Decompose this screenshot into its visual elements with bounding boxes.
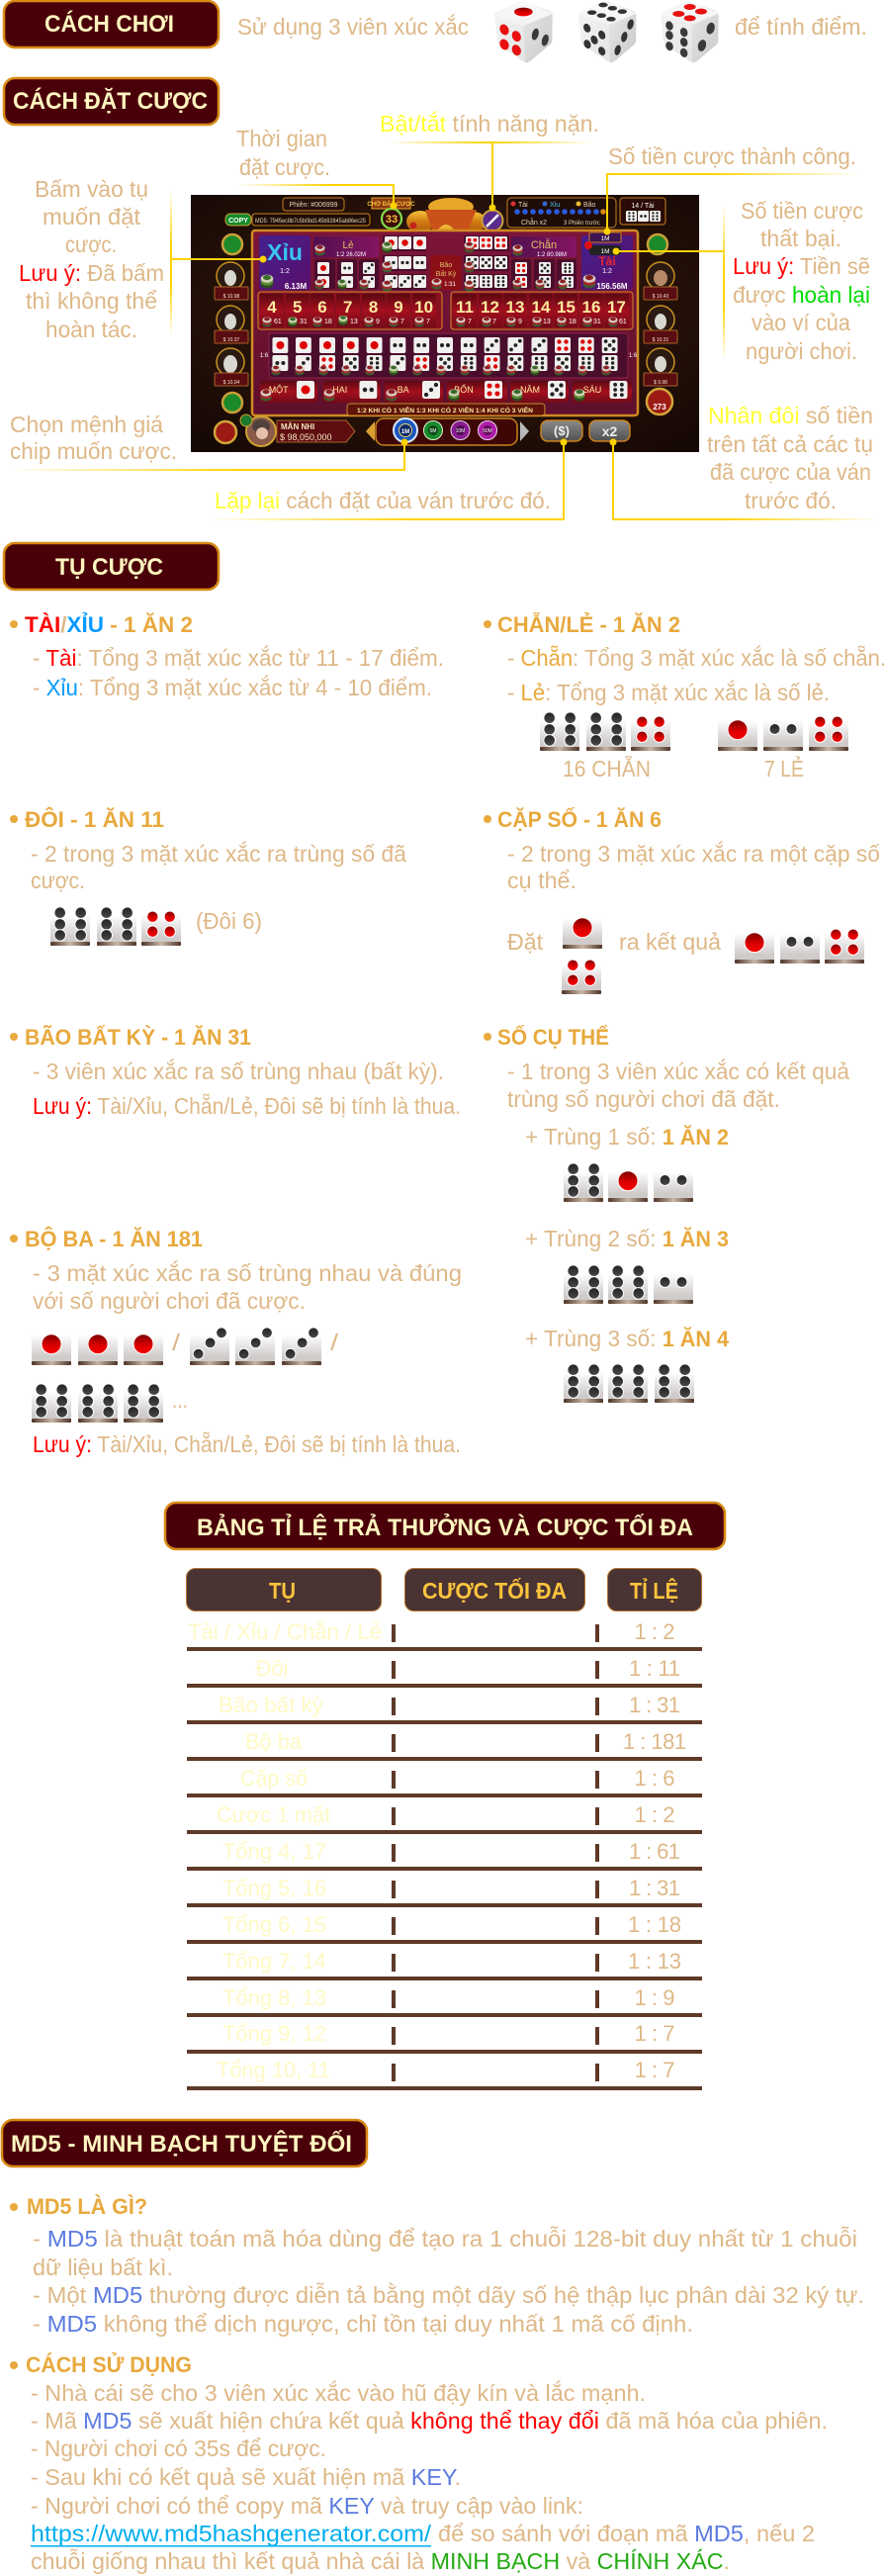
panel: tài xỉu: TÀI/XỈU - 1 ĂN 2 xyxy=(25,612,193,637)
bet: Xỉu xyxy=(259,235,310,291)
row: cặp số: 1 : 6 xyxy=(635,1766,674,1791)
number bets 11 to 17: 7 xyxy=(468,319,472,325)
callout: chọn mệnh giá: chip muốn cược. xyxy=(10,438,177,464)
number bets 4 to 10: 61 xyxy=(274,319,282,325)
callout: nhân đôi: trước đó. xyxy=(745,488,837,513)
panel: chẵn lẻ: 16 CHẴN xyxy=(563,755,651,782)
pair bets: 1:6 xyxy=(260,353,269,359)
number bets 4 to 10: 13 xyxy=(350,319,358,325)
callout: thời gian đặt cược: Thời gian xyxy=(236,126,327,151)
side round buttons: 273 xyxy=(653,403,666,412)
pair bets: 1:6 xyxy=(629,353,638,359)
number bets 11 to 17: 14 xyxy=(532,298,551,317)
number bets 11 to 17: 61 xyxy=(619,319,627,325)
heading button: cách đặt cược: CÁCH ĐẶT CƯỢC xyxy=(13,87,208,115)
panel: bộ ba: Lưu ý: Tài/Xỉu, Chẵn/Lẻ, Đôi sẽ bị tính là thua. xyxy=(33,1430,461,1457)
side player avatars xyxy=(215,262,677,386)
number bets 4 to 10 xyxy=(258,292,442,329)
panel: cách chơi xyxy=(4,1,867,62)
single number bets xyxy=(260,381,632,403)
bet: Bão bất kỳ: 1:31 xyxy=(444,282,456,288)
callout: lặp lại: Lặp lại cách đặt của ván trước đó. xyxy=(215,488,551,513)
panel: số cụ thể: + Trùng 1 số: 1 ĂN 2 xyxy=(525,1124,729,1150)
panel: bộ ba: với số người chơi đã cược. xyxy=(33,1288,306,1314)
number bets 11 to 17: 15 xyxy=(557,298,576,317)
side player avatars: $ 10.37 xyxy=(223,337,240,343)
bet: Tài: 156.56M xyxy=(596,282,628,291)
callout: nhân đôi: đã cược của ván xyxy=(710,459,871,485)
single number bets: SÁU xyxy=(583,385,601,395)
row: tổng 9, 12: 1 : 7 xyxy=(635,2021,674,2046)
table header: tụ xyxy=(186,1569,382,1610)
row: bão bất kỳ: Bão bất kỳ xyxy=(219,1693,323,1717)
game background xyxy=(191,195,699,452)
callout: bật tắt tính năng nặn: Bật/tắt tính năng nặn. xyxy=(380,111,599,137)
gold frog ornament xyxy=(406,198,487,250)
panel: cách sử dụng: - Người chơi có 35s để cược. xyxy=(31,2436,326,2461)
callout: số tiền cược thất bại: thất bại. xyxy=(760,226,842,251)
row: đôi: 1 : 11 xyxy=(629,1656,680,1681)
row: bộ ba xyxy=(187,1729,702,1761)
panel: cách sử dụng: https://www.md5hashgenerator.com/ xyxy=(31,2521,432,2546)
panel: số cụ thể: + Trùng 3 số: 1 ĂN 4 xyxy=(525,1326,730,1351)
bet: Chẵn: 1:2 80.98M xyxy=(537,252,567,258)
row: tổng 4, 17 xyxy=(187,1839,702,1871)
bet: Xỉu: 6.13M xyxy=(285,282,307,291)
game top bar: Phiên: #006999 xyxy=(289,202,338,209)
panel: md5 là gì: dữ liệu bất kì. xyxy=(33,2254,173,2280)
bet: Bão bất kỳ: Bão xyxy=(440,262,452,269)
bet: Xỉu: Xỉu xyxy=(267,239,303,265)
history panel: Xỉu xyxy=(550,201,560,209)
game top bar: 33 xyxy=(386,214,398,226)
payout band xyxy=(347,404,545,415)
heading button: md5 xyxy=(2,2120,367,2166)
panel: bộ ba: BỘ BA - 1 ĂN 181 xyxy=(25,1227,203,1251)
heading button: cách đặt cược xyxy=(4,78,219,125)
repeat button: ($) xyxy=(554,423,570,438)
bet tags 1M: 1M xyxy=(600,248,610,255)
panel: bộ ba: / xyxy=(172,1330,181,1355)
panel: bão bất kỳ: - 3 viên xúc xắc ra số trùng nhau (bất kỳ). xyxy=(33,1058,444,1084)
number bets 4 to 10: 31 xyxy=(300,319,308,325)
callout: số tiền cược thất bại: vào ví của xyxy=(752,310,850,335)
single number bets: BA xyxy=(398,385,409,395)
number bets 11 to 17: 13 xyxy=(506,298,524,317)
row: tổng 9, 12 xyxy=(187,2021,702,2054)
callout: bấm vào tụ: thì không thể xyxy=(26,288,157,314)
row: cược 1 mặt xyxy=(187,1802,702,1834)
chip selector: 10M xyxy=(456,428,465,434)
history panel: Chẵn x2 xyxy=(521,218,547,227)
side player avatars: $ 10.31 xyxy=(653,337,669,343)
panel: cách sử dụng: - Sau khi có kết quả sẽ xuất hiện mã KEY. xyxy=(31,2464,461,2490)
row: tổng 5, 16: 1 : 31 xyxy=(629,1876,680,1900)
panel: đôi: - 2 trong 3 mặt xúc xắc ra trùng số đã xyxy=(31,841,406,867)
bet: Lẻ: 1:2 26.02M xyxy=(336,252,366,258)
row: cặp số xyxy=(187,1766,702,1797)
table header: tỉ lệ: TỈ LỆ xyxy=(630,1576,678,1604)
panel: chẵn lẻ: - Lẻ: Tổng 3 mặt xúc xắc là số lẻ. xyxy=(507,680,830,705)
player plate: $ 98,050,000 xyxy=(280,432,332,442)
callout: lặp lại xyxy=(207,439,568,520)
number bets 11 to 17: 9 xyxy=(518,319,522,325)
row: cược 1 mặt: Cược 1 mặt xyxy=(217,1802,330,1827)
heading button: bảng tỉ lệ xyxy=(165,1503,725,1549)
callout: thời gian đặt cược: đặt cược. xyxy=(239,154,330,180)
number bets 4 to 10: 5 xyxy=(293,298,302,317)
panel: tài xỉu: - Tài: Tổng 3 mặt xúc xắc từ 11 - 17 điểm. xyxy=(33,645,444,671)
panel: chẵn lẻ: CHẴN/LẺ - 1 ĂN 2 xyxy=(497,612,680,637)
row: tổng 10, 11: Tổng 10, 11 xyxy=(217,2058,330,2082)
panel: tài xỉu xyxy=(10,612,444,700)
number bets 11 to 17: 12 xyxy=(481,298,499,317)
row: tổng 5, 16 xyxy=(187,1876,702,1907)
panel: md5 là gì: - MD5 là thuật toán mã hóa dùng để tạo ra 1 chuỗi 128-bit duy nhất từ 1 chuỗi xyxy=(33,2226,857,2252)
number bets 11 to 17: 11 xyxy=(456,298,474,317)
row: tổng 4, 17: Tổng 4, 17 xyxy=(222,1839,326,1864)
panel: cặp số: - 2 trong 3 mặt xúc xắc ra một cặp số xyxy=(507,841,880,867)
bet: Tài xyxy=(581,235,633,291)
panel: chẵn lẻ: 7 LẺ xyxy=(764,754,804,782)
heading button: cách chơi xyxy=(4,1,219,47)
panel: đôi: cược. xyxy=(31,868,85,893)
bet: Lẻ xyxy=(313,236,379,258)
history panel: Bão xyxy=(583,202,596,209)
player plate: MẪN NHI xyxy=(281,422,314,431)
table header: cược tối đa xyxy=(405,1569,585,1610)
row: đôi: Đôi xyxy=(255,1656,289,1681)
heading button: bảng tỉ lệ: BẢNG TỈ LỆ TRẢ THƯỞNG VÀ CƯỢC TỐI ĐA xyxy=(197,1513,693,1541)
panel: bão bất kỳ: Lưu ý: Tài/Xỉu, Chẵn/Lẻ, Đôi sẽ bị tính là thua. xyxy=(33,1092,461,1119)
row: tổng 8, 13 xyxy=(187,1985,702,2017)
history panel xyxy=(507,198,665,228)
callout: nhân đôi: Nhân đôi số tiền xyxy=(708,403,873,428)
number bets 11 to 17: 31 xyxy=(593,319,601,325)
panel: cách sử dụng: CÁCH SỬ DỤNG xyxy=(26,2352,192,2377)
callout: nhân đôi: trên tất cả các tụ xyxy=(707,431,873,457)
panel: đôi xyxy=(10,807,406,946)
heading button: md5: MD5 - MINH BẠCH TUYỆT ĐỐI xyxy=(11,2130,352,2158)
repeat button xyxy=(541,420,582,441)
row: bộ ba: 1 : 181 xyxy=(623,1729,686,1754)
game top bar: CHỜ ĐẶT CƯỢC xyxy=(367,200,415,208)
bet tags 1M: 1M xyxy=(600,235,610,242)
callout: bật tắt tính năng nặn xyxy=(380,111,599,212)
row: bão bất kỳ xyxy=(187,1693,702,1724)
panel: số cụ thể: - 1 trong 3 viên xúc xắc có kết quả xyxy=(507,1058,849,1084)
game top bar: COPY xyxy=(228,218,248,225)
callout: số tiền cược thất bại: Lưu ý: Tiền sẽ xyxy=(733,253,870,279)
row: bộ ba: Bộ ba xyxy=(245,1729,303,1754)
callout: bấm vào tụ xyxy=(19,176,267,342)
row: tổng 4, 17: 1 : 61 xyxy=(629,1839,680,1864)
callout: số tiền cược thành công: Số tiền cược thành công. xyxy=(608,143,856,169)
number bets 4 to 10: 10 xyxy=(414,298,433,317)
panel: cặp số xyxy=(484,806,880,994)
row: tổng 7, 14: 1 : 13 xyxy=(628,1949,681,1974)
number bets 11 to 17: 16 xyxy=(582,298,600,317)
callout: bấm vào tụ: Bấm vào tụ xyxy=(35,176,148,202)
bet tags 1M xyxy=(584,232,621,255)
callout: số tiền cược thất bại xyxy=(613,198,870,364)
game top bar: MD5: 7945ec8b7c5b0bd145b92845ab86ec25 xyxy=(255,219,367,225)
icon: three dice xyxy=(494,1,719,62)
row: tổng 9, 12: Tổng 9, 12 xyxy=(222,2021,326,2046)
text: để tính điểm: để tính điểm. xyxy=(735,14,867,40)
payout band: 1:2 KHI CÓ 1 VIÊN 1:3 KHI CÓ 2 VIÊN 1:4 KHI CÓ 3 VIÊN xyxy=(357,407,533,414)
single number bets: BỐN xyxy=(454,384,474,395)
bet: single dice pairs right xyxy=(511,259,576,289)
panel: md5 là gì: - Một MD5 thường được diễn tả bằng một dãy số hệ thập lục phân dài 32 ký tự. xyxy=(33,2282,864,2308)
number bets 11 to 17: 18 xyxy=(569,319,576,325)
row: tổng 10, 11 xyxy=(187,2058,702,2090)
panel: tài xỉu: - Xỉu: Tổng 3 mặt xúc xắc từ 4 - 10 điểm. xyxy=(33,675,432,700)
bet: Tài: Tài xyxy=(598,254,616,268)
toggle squeeze button xyxy=(483,210,502,231)
panel: cặp số: CẶP SỐ - 1 ĂN 6 xyxy=(497,806,662,832)
callout: bấm vào tụ: Lưu ý: Đã bấm xyxy=(19,260,164,286)
chip selector xyxy=(366,418,529,445)
side player avatars: $ 10.98 xyxy=(223,294,240,300)
number bets 4 to 10: 9 xyxy=(394,298,403,317)
row: tài xỉu chẵn lẻ xyxy=(187,1619,702,1651)
callout: bấm vào tụ: hoàn tác. xyxy=(45,317,137,342)
number bets 4 to 10: 7 xyxy=(343,298,352,317)
side player avatars: $ 10.43 xyxy=(653,294,669,300)
callout: nhân đôi xyxy=(609,403,880,520)
bet: Tài: 1:2 xyxy=(602,268,612,275)
row: đôi xyxy=(187,1656,702,1688)
heading button: tụ cược: TỤ CƯỢC xyxy=(55,554,163,581)
panel: md5 là gì: MD5 LÀ GÌ? xyxy=(27,2194,147,2219)
row: tổng 6, 15 xyxy=(187,1912,702,1944)
panel: số cụ thể: + Trùng 2 số: 1 ĂN 3 xyxy=(525,1226,729,1251)
chip selector: 1M xyxy=(401,429,409,435)
heading button: tụ cược xyxy=(4,543,219,590)
callout: số tiền cược thất bại: Số tiền cược xyxy=(741,198,863,224)
bet: triples right xyxy=(464,235,509,292)
panel: cách sử dụng: chuỗi giống nhau thì kết quả nhà cái là MINH BẠCH và CHÍNH XÁC. xyxy=(31,2548,730,2574)
number bets 4 to 10: 6 xyxy=(317,298,327,317)
number bets 4 to 10: 8 xyxy=(369,298,378,317)
number bets 4 to 10: 7 xyxy=(426,319,430,325)
bet: Bão bất kỳ xyxy=(430,255,461,290)
panel: cách sử dụng: - Nhà cái sẽ cho 3 viên xúc xắc vào hũ đậy kín và lắc mạnh. xyxy=(31,2380,646,2406)
panel: bộ ba: ... xyxy=(172,1387,188,1413)
heading button: cách chơi: CÁCH CHƠI xyxy=(44,10,174,38)
number bets 11 to 17: 13 xyxy=(543,319,551,325)
table header: cược tối đa: CƯỢC TỐI ĐA xyxy=(422,1577,567,1604)
number bets 4 to 10: 7 xyxy=(400,319,404,325)
callout: chọn mệnh giá: Chọn mệnh giá xyxy=(10,412,163,437)
row: tổng 6, 15: Tổng 6, 15 xyxy=(222,1912,326,1937)
history panel: Tài xyxy=(518,202,528,209)
panel: bộ ba xyxy=(10,1227,462,1457)
row: cược 1 mặt: 1 : 2 xyxy=(635,1802,674,1827)
number bets 4 to 10: 9 xyxy=(376,319,380,325)
panel: md5 là gì: - MD5 không thể dịch ngược, chỉ tồn tại duy nhất 1 mã cố định. xyxy=(33,2311,693,2337)
panel: số cụ thể: trùng số người chơi đã đặt. xyxy=(507,1086,780,1112)
row: tổng 6, 15: 1 : 18 xyxy=(628,1912,681,1937)
history panel: 14 / Tài xyxy=(631,203,655,210)
row: tổng 8, 13: 1 : 9 xyxy=(635,1985,674,2010)
number bets 11 to 17 xyxy=(451,292,633,329)
panel: cặp số: cụ thể. xyxy=(507,868,576,893)
bet: Bão bất kỳ: Bất Kỳ xyxy=(436,269,457,278)
number bets 4 to 10: 18 xyxy=(324,319,332,325)
panel: đôi: (Đôi 6) xyxy=(196,908,262,934)
callout: bấm vào tụ: cược. xyxy=(65,231,117,257)
side round buttons xyxy=(215,234,672,443)
text: sử dụng: Sử dụng 3 viên xúc xắc xyxy=(237,14,469,40)
row: tổng 5, 16: Tổng 5, 16 xyxy=(222,1876,326,1900)
panel: bão bất kỳ: BÃO BẤT KỲ - 1 ĂN 31 xyxy=(25,1025,251,1050)
callout: số tiền cược thất bại: người chơi. xyxy=(746,338,857,364)
panel: bão bất kỳ xyxy=(10,1025,461,1119)
panel: cặp số: Đặt xyxy=(507,929,544,955)
chip selector: 50M xyxy=(483,428,492,434)
bet: Chẵn: Chẵn xyxy=(531,238,557,251)
row: tổng 10, 11: 1 : 7 xyxy=(635,2058,674,2082)
row: tổng 8, 13: Tổng 8, 13 xyxy=(222,1985,326,2010)
row: tổng 7, 14 xyxy=(187,1949,702,1980)
bet: triples left xyxy=(382,235,426,292)
bet: single dice pairs left xyxy=(314,259,379,289)
row: tổng 7, 14: Tổng 7, 14 xyxy=(222,1949,326,1974)
callout: số tiền cược thành công xyxy=(603,143,859,235)
table header: tỉ lệ xyxy=(607,1569,702,1610)
double button xyxy=(589,420,630,441)
panel: cách sử dụng xyxy=(10,2352,828,2574)
number bets 11 to 17: 17 xyxy=(607,298,626,317)
panel: bộ ba: - 3 mặt xúc xắc ra số trùng nhau và đúng xyxy=(33,1260,462,1286)
game top bar xyxy=(225,198,415,229)
panel: cách sử dụng: - Mã MD5 sẽ xuất hiện chứa kết quả không thể thay đổi đã mã hóa của phiên. xyxy=(31,2408,828,2434)
bet: Xỉu: 1:2 xyxy=(280,268,290,275)
panel: cách sử dụng: - Người chơi có thể copy mã KEY và truy cập vào link: xyxy=(31,2493,583,2519)
panel: đôi: ĐÔI - 1 ĂN 11 xyxy=(25,807,164,832)
row: tài xỉu chẵn lẻ: 1 : 2 xyxy=(635,1619,674,1644)
callout: thời gian đặt cược xyxy=(236,126,398,210)
panel: game screenshot xyxy=(191,195,699,452)
bet: Chẵn xyxy=(511,236,576,258)
panel: md5 là gì xyxy=(10,2194,864,2337)
panel: cặp số: ra kết quả xyxy=(619,929,721,955)
panel: bộ ba: / xyxy=(330,1330,339,1355)
chip selector: 5M xyxy=(430,428,436,434)
panel: số cụ thể: SỐ CỤ THỂ xyxy=(497,1024,609,1050)
payout table xyxy=(186,1569,702,2090)
side player avatars: $ 10.04 xyxy=(223,380,240,386)
panel: cách sử dụng: để so sánh với đoạn mã MD5, nếu 2 xyxy=(438,2521,815,2546)
single number bets: MỘT xyxy=(269,385,289,395)
row: tài xỉu chẵn lẻ: Tài / Xỉu / Chẵn / Lẻ xyxy=(188,1619,382,1644)
single number bets: NĂM xyxy=(520,385,540,395)
bet: Lẻ: Lẻ xyxy=(342,240,354,251)
history panel: 3 Phiên trước xyxy=(564,221,600,227)
double button: x2 xyxy=(602,423,617,439)
number bets 4 to 10: 4 xyxy=(267,298,277,317)
panel: chẵn lẻ xyxy=(484,612,886,782)
pair bets xyxy=(260,333,638,378)
side player avatars: $ 9.98 xyxy=(654,380,667,386)
callout: bấm vào tụ: muốn đặt xyxy=(43,204,141,230)
panel: số cụ thể xyxy=(484,1024,849,1403)
table header: tụ: TỤ xyxy=(269,1578,296,1604)
betting table xyxy=(252,230,638,415)
player plate xyxy=(240,414,355,446)
row: bão bất kỳ: 1 : 31 xyxy=(629,1693,680,1717)
callout: số tiền cược thất bại: được hoàn lại xyxy=(733,282,870,308)
number bets 11 to 17: 7 xyxy=(492,319,496,325)
single number bets: HAI xyxy=(332,385,347,395)
callout: chọn mệnh giá xyxy=(7,412,407,471)
row: cặp số: Cặp số xyxy=(240,1766,308,1791)
